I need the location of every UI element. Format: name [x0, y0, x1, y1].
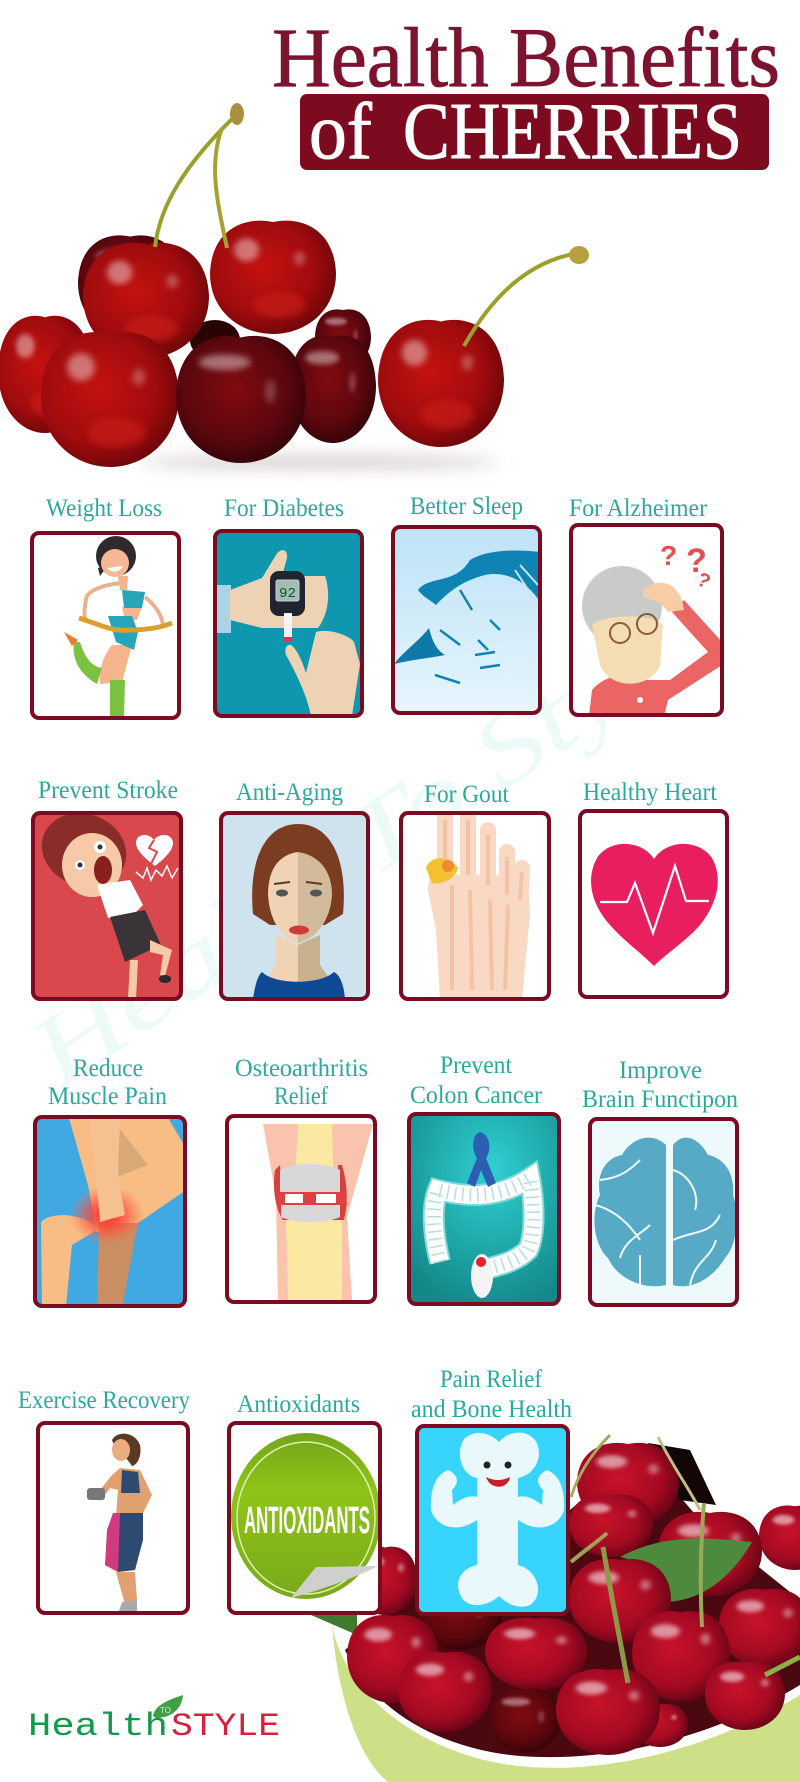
- label: Weight Loss: Weight Loss: [46, 495, 162, 522]
- illustration: confused elderly woman: [582, 540, 722, 716]
- panel: Reduce Muscle Pain card: [35, 1117, 186, 1308]
- panel: Healthy Heart card: [580, 811, 727, 997]
- card frame: [35, 1117, 185, 1306]
- card frame: [571, 525, 722, 715]
- logo: Health To Style: STYLE: [171, 1708, 280, 1745]
- panel: Prevent Colon Cancer card: [409, 1114, 559, 1304]
- card frame: [38, 1423, 188, 1613]
- panel: Pain Relief and Bone Health card: [417, 1426, 568, 1614]
- label: Osteoarthritis Relief: [235, 1055, 368, 1110]
- label: Prevent Colon Cancer: Prevent: [440, 1052, 512, 1079]
- card frame: [215, 531, 362, 716]
- card frame: [229, 1423, 380, 1613]
- illustration: colon and blue ribbon: [434, 1132, 534, 1298]
- label: Prevent Colon Cancer: Colon Cancer: [410, 1082, 543, 1109]
- title: Health Benefits: Health Benefits: [272, 11, 780, 105]
- card frame: [393, 527, 540, 713]
- label: Prevent Colon Cancer: [410, 1052, 543, 1109]
- panel: Exercise Recovery card: [38, 1423, 188, 1614]
- label: Improve Brain Functipon: [582, 1057, 738, 1113]
- label: Antioxidants: Antioxidants: [237, 1391, 360, 1418]
- label: For Alzheimer: For Alzheimer: [569, 495, 708, 522]
- illustration: confused elderly woman: ?: [660, 540, 677, 571]
- illustration: confused elderly woman: ?: [686, 542, 707, 580]
- title banner: of CHERRIES: CHERRIES: [403, 86, 742, 176]
- card frame: [590, 1119, 737, 1305]
- card frame: [409, 1114, 559, 1304]
- card frame: [580, 811, 727, 997]
- illustration: flexing cartoon bone: [431, 1433, 564, 1607]
- card frame: [221, 813, 368, 999]
- label: Pain Relief and Bone Health: Pain Relief: [440, 1366, 543, 1393]
- card frame: [417, 1426, 568, 1614]
- photo: pile of cherries: [0, 103, 589, 468]
- label: Osteoarthritis Relief: Osteoarthritis: [235, 1055, 368, 1082]
- panel: Anti-Aging card: [221, 813, 368, 999]
- illustration: woman lifting dumbbell: [87, 1434, 152, 1614]
- label: Anti-Aging: Anti-Aging: [236, 779, 343, 806]
- illustration: sleeping face: [394, 550, 542, 683]
- label: Reduce Muscle Pain: Reduce: [73, 1055, 143, 1082]
- card frame: [32, 533, 179, 718]
- illustration: brain: [594, 1138, 737, 1286]
- panel: Osteoarthritis Relief card: [227, 1116, 375, 1302]
- label: Osteoarthritis Relief: Relief: [274, 1083, 329, 1110]
- panel: Improve Brain Function card: [590, 1119, 737, 1305]
- label: Improve Brain Functipon: Brain Functipon: [582, 1086, 738, 1113]
- panel: For Diabetes card: [215, 531, 362, 716]
- card frame: [33, 813, 181, 999]
- illustration: foot bones with gout: [426, 815, 530, 999]
- panel: For Alzheimer card: [571, 525, 722, 716]
- panel: Prevent Stroke card: [31, 801, 181, 999]
- title banner: of CHERRIES: of: [309, 86, 372, 176]
- card frame: [227, 1116, 375, 1302]
- label: Improve Brain Functipon: Improve: [619, 1057, 702, 1084]
- illustration: damaged knee joint: [263, 1124, 373, 1300]
- panel: Antioxidants card: [229, 1423, 382, 1615]
- icon: green antioxidants sticker: [231, 1433, 378, 1599]
- label: For Gout: For Gout: [424, 781, 509, 808]
- label: Exercise Recovery: Exercise Recovery: [18, 1387, 190, 1414]
- logo: Health To Style: Health: [28, 1708, 168, 1745]
- text: ANTIOXIDANTS: [244, 1500, 370, 1542]
- panel: Better Sleep card: [393, 527, 542, 713]
- illustration: woman clutching chest: [42, 815, 179, 997]
- label: Better Sleep: Better Sleep: [410, 493, 523, 520]
- icon: heart with ECG line: [591, 844, 718, 966]
- illustration: glucose meter in hand: [216, 550, 360, 716]
- label: Pain Relief and Bone Health: and Bone Health: [411, 1396, 572, 1423]
- illustration: glucose meter in hand: 92: [279, 586, 296, 602]
- label: Pain Relief and Bone Health: [411, 1366, 572, 1423]
- panel: Weight Loss card: [32, 533, 179, 718]
- watermark: Health To Style: [8, 580, 719, 1110]
- illustration: hand on sore leg: [41, 1118, 186, 1308]
- illustration: confused elderly woman: ?: [693, 568, 714, 594]
- label: Prevent Stroke: Prevent Stroke: [38, 777, 178, 804]
- logo: Health To Style: [28, 1695, 280, 1745]
- photo: bowl of cherries: [311, 1435, 800, 1782]
- label: Reduce Muscle Pain: [48, 1055, 167, 1110]
- card frame: [401, 813, 549, 999]
- label: For Diabetes: For Diabetes: [224, 495, 344, 522]
- label: Reduce Muscle Pain: Muscle Pain: [48, 1083, 167, 1110]
- logo: Health To Style: TO: [160, 1706, 171, 1715]
- illustration: half young half old face: [252, 824, 345, 999]
- label: Healthy Heart: Healthy Heart: [583, 779, 717, 806]
- illustration: woman measuring waist: [64, 536, 172, 718]
- panel: For Gout card: [401, 813, 549, 999]
